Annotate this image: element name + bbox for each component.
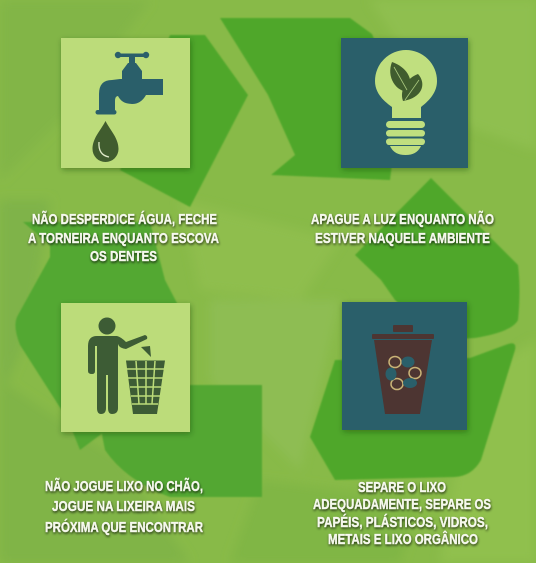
sorting text: ADEQUADAMENTE, SEPARE OS xyxy=(313,497,491,513)
panel: sorting tip xyxy=(313,302,491,548)
icon: recycling bin xyxy=(372,325,434,414)
sorting text: PAPÉIS, PLÁSTICOS, VIDROS, xyxy=(317,514,488,531)
water card xyxy=(61,38,190,168)
arrow: top left xyxy=(120,35,248,207)
icon: water drop xyxy=(92,121,118,162)
light text: APAGUE A LUZ ENQUANTO NÃO xyxy=(311,210,494,228)
light card xyxy=(341,38,468,168)
water text: NÃO DESPERDICE ÁGUA, FECHE xyxy=(32,210,217,228)
litter text: PRÓXIMA QUE ENCONTRAR xyxy=(45,518,203,536)
litter text: NÃO JOGUE LIXO NO CHÃO, xyxy=(45,477,203,495)
litter card xyxy=(61,303,190,432)
arrow: bottom right xyxy=(310,343,515,480)
icon: recycling symbol xyxy=(386,356,421,390)
panel: litter tip xyxy=(45,303,203,536)
arrow: top right xyxy=(220,18,400,180)
litter text: JOGUE NA LIXEIRA MAIS xyxy=(52,499,195,515)
panel: water tip xyxy=(28,38,219,265)
water text: OS DENTES xyxy=(90,249,157,265)
sorting text xyxy=(313,480,491,548)
panel: light tip xyxy=(311,38,494,247)
arrow: right xyxy=(355,178,520,340)
water text: A TORNEIRA ENQUANTO ESCOVA xyxy=(28,231,219,247)
sorting text: METAIS E LIXO ORGÂNICO xyxy=(328,530,478,548)
icon: wastebasket xyxy=(126,360,165,414)
arrow: bottom left xyxy=(100,385,262,497)
icon: light bulb with leaves xyxy=(375,50,437,155)
sorting card xyxy=(342,302,467,430)
sorting text: SEPARE O LIXO xyxy=(358,480,446,496)
litter text xyxy=(45,477,203,536)
light text: ESTIVER NAQUELE AMBIENTE xyxy=(315,231,490,247)
light text xyxy=(311,210,494,247)
icon: person throwing litter xyxy=(88,318,151,414)
water text xyxy=(28,210,219,265)
icon: faucet xyxy=(96,52,163,114)
arrow: left xyxy=(15,222,190,450)
